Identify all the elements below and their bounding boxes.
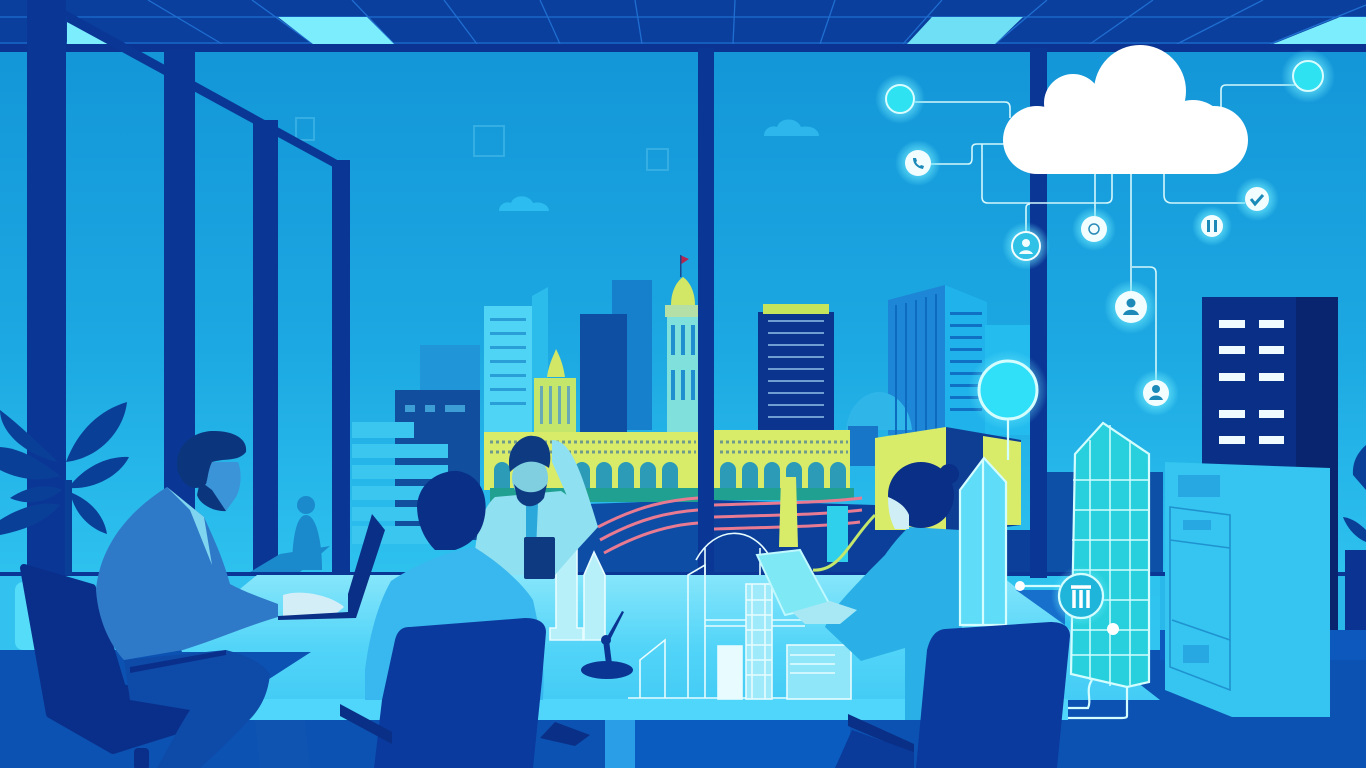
right floor xyxy=(1160,630,1366,660)
armrest xyxy=(130,650,226,673)
person left: bearded man at laptop xyxy=(96,431,385,768)
obelisk chain and small tower in city xyxy=(779,477,875,570)
distant silhouette figures xyxy=(250,496,330,572)
capitol tower with flag xyxy=(534,255,698,437)
dark wedge under glowing node xyxy=(1016,590,1065,625)
jacket xyxy=(96,487,278,660)
hair xyxy=(177,431,246,488)
right sill and floor band xyxy=(1160,575,1366,630)
building behind glowing tower xyxy=(1047,472,1163,575)
wireframe glowing towers xyxy=(960,350,1149,718)
conference table xyxy=(178,575,1160,768)
chair front centre xyxy=(340,618,546,768)
ceiling with grid and light panels xyxy=(0,0,1366,52)
left leg on floor xyxy=(255,720,310,768)
yellow palace building xyxy=(484,427,1021,530)
plants xyxy=(0,402,1366,630)
person right with laptop xyxy=(757,462,962,720)
head xyxy=(196,462,241,511)
person front centre, back view xyxy=(365,471,544,700)
trousers xyxy=(124,650,270,768)
cloud xyxy=(1003,45,1248,174)
model buildings on table xyxy=(550,497,851,699)
collar xyxy=(167,487,212,565)
window frame columns xyxy=(0,0,1366,578)
city skyline: background towers xyxy=(352,280,1030,544)
distant clouds and squares xyxy=(296,118,819,211)
desk ornament xyxy=(581,611,633,679)
beard xyxy=(197,481,226,511)
person centre back: man with glasses xyxy=(474,436,598,579)
floor xyxy=(0,650,1366,768)
server rack xyxy=(1202,297,1338,630)
front man's foot xyxy=(540,722,590,746)
cyan planter xyxy=(15,582,51,650)
network icon nodes xyxy=(875,49,1335,416)
roads with red light trails xyxy=(490,488,1030,575)
chair left xyxy=(24,568,228,766)
cloud network connectors xyxy=(915,85,1295,380)
laptop xyxy=(278,514,385,620)
chair right xyxy=(835,622,1070,768)
left sill xyxy=(0,575,260,650)
hands xyxy=(283,593,344,617)
filing cabinet xyxy=(1165,462,1330,717)
